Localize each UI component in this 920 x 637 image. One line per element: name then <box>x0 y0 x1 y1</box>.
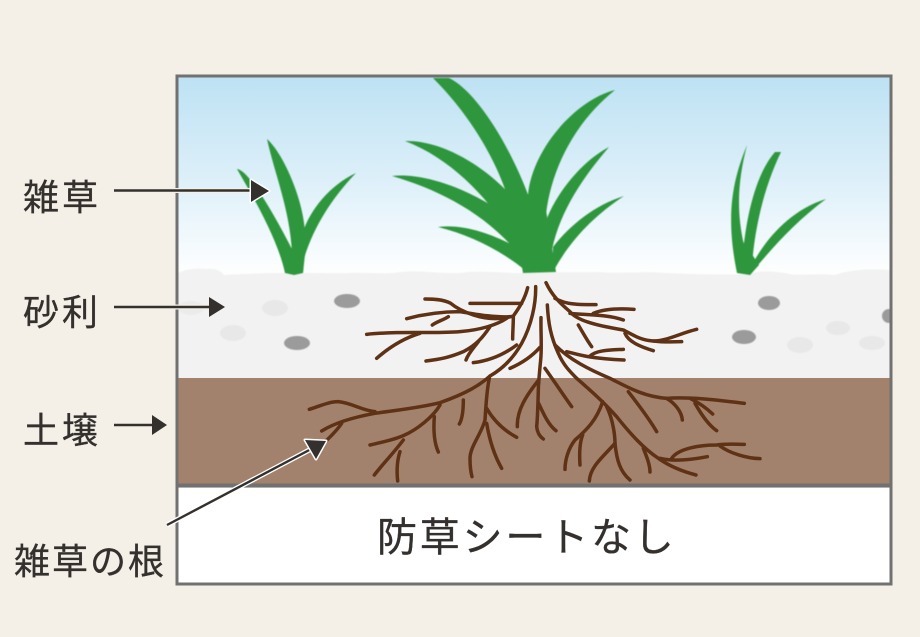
sheet-less white band <box>178 488 890 583</box>
soil roots, right <box>577 378 696 475</box>
plant roots <box>309 283 760 481</box>
arrow: weed label to weed <box>114 180 269 202</box>
gravel stones <box>178 294 896 353</box>
plant: left weed <box>237 139 356 275</box>
label: 雑草の根: 雑草の根 <box>14 541 166 582</box>
panel: cross-section diagram <box>177 76 896 584</box>
arrow: root label to weed root <box>167 440 326 525</box>
arrow: gravel label to gravel <box>114 297 225 317</box>
label: 雑草: 雑草 <box>23 177 101 218</box>
frame <box>177 76 891 584</box>
label: 土壌: 土壌 <box>23 410 101 451</box>
soil layer <box>178 378 890 484</box>
gravel roots, right <box>546 283 697 341</box>
sky layer <box>178 77 890 277</box>
gravel layer <box>178 269 896 378</box>
plant: centre weed <box>392 78 624 273</box>
plant: right weed <box>731 145 826 275</box>
soil roots, left <box>322 376 490 431</box>
label: 砂利: 砂利 <box>23 292 101 333</box>
gravel roots, left <box>425 288 528 319</box>
heading: 防草シートなし: 防草シートなし <box>377 516 677 560</box>
arrow: soil label to soil <box>114 415 167 435</box>
soil roots, centre <box>517 380 539 427</box>
